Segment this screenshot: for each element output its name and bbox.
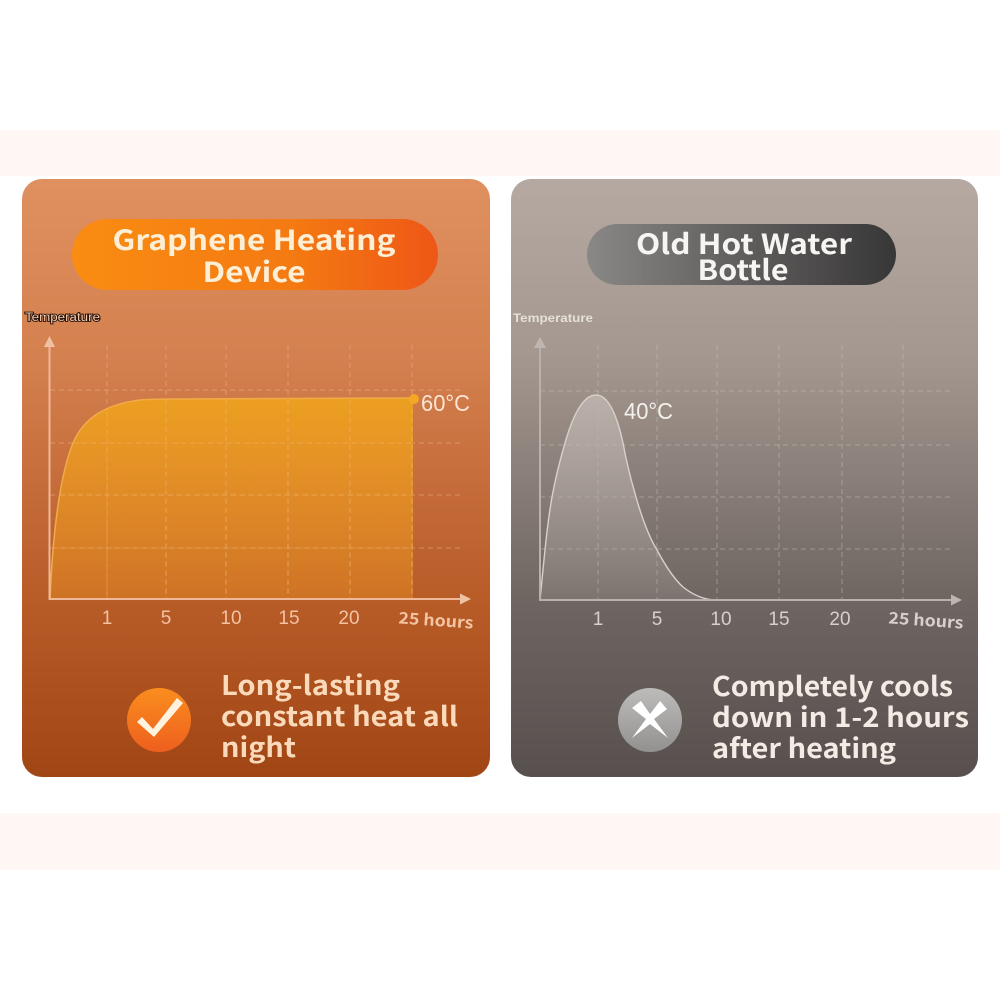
text: long-lasting constant heat: constant heat all bbox=[221, 695, 458, 734]
text: completely cools: Completely cools bbox=[712, 665, 953, 704]
heading pill: graphene bbox=[72, 219, 438, 291]
line chart: graphene temperature bbox=[44, 336, 474, 634]
value label: 60°C: 60°C bbox=[421, 390, 470, 416]
heading pill: old bottle: Old Hot Water bbox=[636, 223, 853, 263]
x axis labels right bbox=[593, 604, 964, 634]
x axis labels right: 10 bbox=[710, 609, 732, 630]
heading pill: old bottle: Bottle bbox=[698, 249, 788, 289]
value label: 40°C: 40°C bbox=[624, 398, 673, 424]
text: long-lasting constant heat: Long-lasting bbox=[221, 664, 400, 703]
x axis labels left: 5 bbox=[161, 608, 171, 629]
text: completely cools: down in 1-2 hours bbox=[712, 696, 969, 735]
x axis labels right: 20 bbox=[829, 609, 851, 630]
text: completely cools bbox=[712, 665, 969, 766]
arrow: x axis left bbox=[460, 594, 471, 604]
text: completely cools: after heating bbox=[712, 727, 896, 766]
x axis labels left: 20 bbox=[338, 608, 360, 629]
heading pill: old bottle bbox=[587, 223, 896, 289]
x axis labels left bbox=[102, 604, 474, 634]
x axis labels right: 25 hours bbox=[888, 604, 964, 634]
arrow: y axis left bbox=[44, 336, 55, 347]
x axis labels right: 5 bbox=[652, 609, 662, 630]
x axis labels left: 10 bbox=[220, 608, 242, 629]
heading pill: graphene: Device bbox=[202, 251, 306, 291]
arrow: x axis right bbox=[951, 594, 962, 606]
arrow: y axis right bbox=[534, 337, 546, 348]
line chart: old bottle temperature bbox=[534, 337, 964, 634]
x axis labels right: 1 bbox=[593, 609, 603, 630]
background band: bottom bbox=[0, 813, 1000, 870]
x axis labels left: 25 hours bbox=[398, 604, 474, 634]
text: long-lasting constant heat: night bbox=[221, 726, 296, 765]
icon: cross mark bbox=[618, 688, 682, 752]
text: long-lasting constant heat bbox=[221, 664, 458, 765]
panel: old hot water bottle bbox=[511, 179, 978, 777]
axis label: temperature right: Temperature bbox=[513, 311, 593, 325]
axis label: temperature left: Temperature bbox=[25, 312, 100, 324]
heading pill: graphene: Graphene Heating bbox=[112, 219, 396, 259]
background band: top bbox=[0, 130, 1000, 176]
x axis labels left: 1 bbox=[102, 608, 112, 629]
icon: check mark bbox=[127, 688, 191, 752]
x axis labels right: 15 bbox=[768, 609, 790, 630]
x axis labels left: 15 bbox=[278, 608, 300, 629]
panel: graphene heating device bbox=[22, 179, 490, 777]
data point: 60 degrees bbox=[409, 394, 419, 404]
